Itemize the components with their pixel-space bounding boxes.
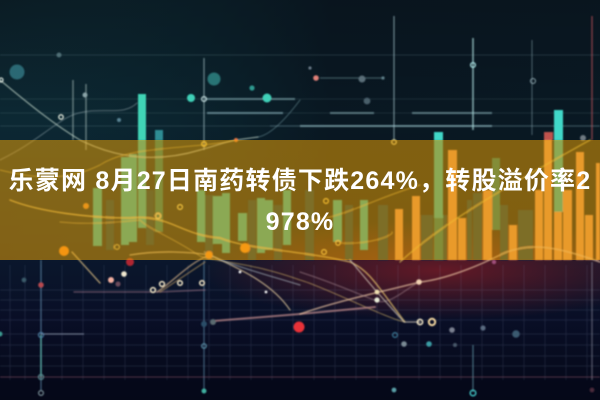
- dim background bars: [106, 190, 533, 260]
- orange bars: [395, 140, 600, 260]
- upper horizontal guide lines: [0, 55, 600, 126]
- teal top segments above band: [138, 94, 146, 140]
- title: 978%: [266, 208, 334, 236]
- bar chart: [93, 94, 600, 260]
- olive bars: [155, 140, 500, 260]
- translucent title band: [0, 140, 600, 260]
- trend lines: [0, 80, 600, 322]
- title: 乐蒙网 8月27日南药转债下跌264%，转股溢价率2: [9, 167, 591, 195]
- title: [9, 167, 591, 236]
- green bars: [93, 140, 563, 253]
- grid lines: [0, 265, 600, 380]
